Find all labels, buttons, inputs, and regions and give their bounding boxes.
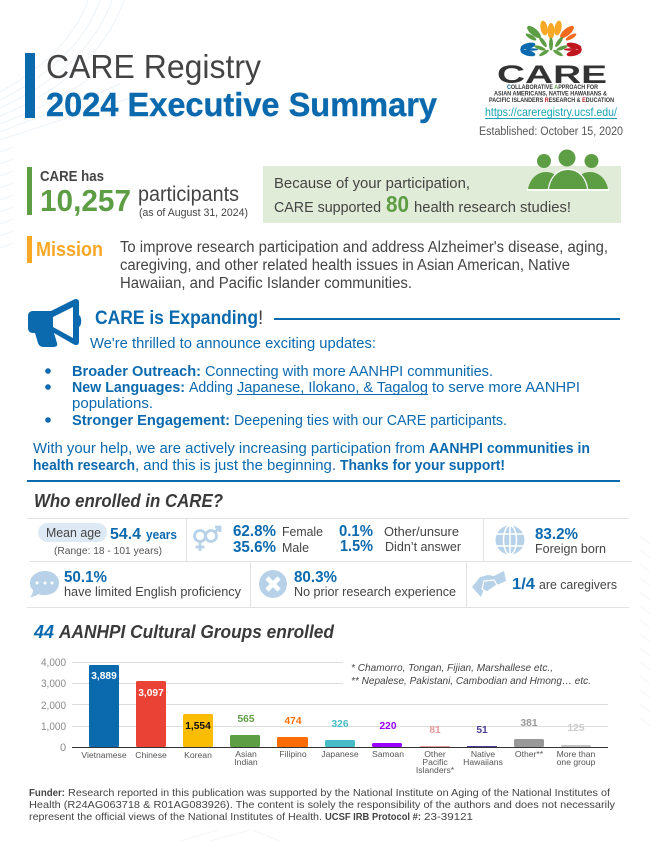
bullet list: Broader Outreach: <box>72 364 201 380</box>
bar chart: 3,000 <box>41 678 66 690</box>
bar values: 81 <box>429 725 441 736</box>
stat: mean age: (Range: 18 - 101 years) <box>54 545 162 557</box>
stat: foreign born: Foreign born <box>535 542 606 556</box>
established date: Established: October 15, 2020 <box>479 126 623 138</box>
stat: foreign born: 83.2% <box>535 526 578 543</box>
stat: gender: Female <box>282 525 323 539</box>
category labels: Hawaiians <box>463 757 503 767</box>
bullet list: Deepening ties with our CARE participants. <box>234 413 507 429</box>
CARE logo: PACIFIC ISLANDERS RESEARCH & EDUCATION <box>489 98 614 104</box>
mission <box>27 236 608 292</box>
website link: https://careregistry.ucsf.edu/ <box>485 105 618 119</box>
bar chart: 4,000 <box>41 657 66 669</box>
category labels: Other** <box>515 749 544 759</box>
funder statement: UCSF IRB Protocol #: <box>325 811 421 823</box>
closing message: , and this is just the beginning. <box>135 457 336 474</box>
stat: caregivers: are caregivers <box>539 578 617 592</box>
bar values: 220 <box>380 721 397 732</box>
title: 2024 Executive Summary <box>46 86 438 123</box>
panel: research studies <box>263 150 621 223</box>
bar values: 565 <box>238 714 255 725</box>
funder statement: Research reported in this publication was supported by the National Institute on Aging of the National Institutes of <box>68 787 610 799</box>
CARE logo: ASIAN AMERICANS, NATIVE HAWAIIANS & <box>494 92 608 98</box>
funder statement: Health (R24AG063718 & R01AG083926). The content is solely the responsibility of the authors and does not necessarily <box>29 799 616 811</box>
category labels: Indian <box>234 757 258 767</box>
stat: research experience <box>294 569 456 599</box>
CARE logo: COLLABORATIVE APPROACH FOR <box>507 85 599 91</box>
panel: research studies: health research studies! <box>414 199 571 216</box>
category labels: Pacific <box>422 757 448 767</box>
bullet list: Japanese, Ilokano, & Tagalog <box>237 380 428 396</box>
bar values: 125 <box>568 723 585 734</box>
stat: gender: 0.1% <box>339 523 373 540</box>
participants count: participants <box>138 183 239 206</box>
bar chart: 1,000 <box>41 721 66 733</box>
stat: research experience: 80.3% <box>294 569 337 586</box>
bullet list: New Languages: <box>72 380 185 396</box>
stat: mean age <box>38 523 177 557</box>
icon: globe <box>496 525 524 555</box>
icon: speech bubble <box>30 571 59 597</box>
stat: mean age: years <box>146 527 177 542</box>
funder statement: Funder: <box>29 787 65 799</box>
bar values: 381 <box>520 718 538 729</box>
bar values: 1,554 <box>185 721 211 732</box>
icon: people <box>525 150 611 191</box>
closing message <box>27 440 620 482</box>
title <box>25 48 438 123</box>
stat: gender: 35.6% <box>233 539 276 556</box>
heading: cultural groups: AANHPI Cultural Groups enrolled <box>58 621 335 642</box>
category labels: Islanders* <box>416 765 455 775</box>
heading: Who enrolled: Who enrolled in CARE? <box>34 490 223 511</box>
CARE logo: CARE <box>497 61 607 89</box>
category labels: Japanese <box>321 749 359 759</box>
bar values: 3,097 <box>138 688 164 699</box>
participants count: 10,257 <box>40 183 131 218</box>
category labels: Native <box>471 749 495 759</box>
stat: gender <box>233 523 461 556</box>
bar values: 474 <box>284 716 302 727</box>
heading: CARE is Expanding <box>95 308 620 329</box>
mission: Mission <box>36 239 103 261</box>
category labels <box>81 749 596 775</box>
heading: cultural groups: 44 <box>33 621 54 642</box>
stat: gender: 1.5% <box>340 538 373 555</box>
panel: research studies: 80 <box>386 191 409 217</box>
chart footnotes: * Chamorro, Tongan, Fijian, Marshallese etc., <box>351 662 553 674</box>
bullet list <box>45 364 580 429</box>
stat: caregivers <box>512 576 617 593</box>
stat: mean age: 54.4 <box>110 526 141 543</box>
mission: Hawaiian, and Pacific Islander communities. <box>120 275 412 292</box>
stat: English proficiency: have limited English proficiency <box>64 585 242 599</box>
bar values: 326 <box>332 719 349 730</box>
icon: megaphone <box>28 299 81 347</box>
stat: foreign born <box>535 526 606 556</box>
participants count: (as of August 31, 2024) <box>139 207 248 219</box>
bars <box>89 665 591 748</box>
panel: research studies: CARE supported <box>274 199 381 216</box>
stat: gender: Other/unsure <box>384 525 459 539</box>
category labels: Chinese <box>135 750 167 760</box>
funder statement <box>29 787 616 823</box>
bar values <box>91 671 585 736</box>
title: CARE Registry <box>46 48 261 85</box>
participants count: CARE has <box>40 169 104 185</box>
intro text: We're thrilled to announce exciting updates: <box>90 335 376 352</box>
closing message: Thanks for your support! <box>340 457 505 474</box>
stat: English proficiency <box>64 569 242 599</box>
mission: caregiving, and other related health issues in Asian American, Native <box>120 257 570 274</box>
stat: gender: 62.8% <box>233 523 276 540</box>
stat: mean age: Mean age <box>46 526 101 540</box>
category labels: More than <box>557 749 596 759</box>
icon: handshake <box>472 571 506 597</box>
closing message: With your help, we are actively increasing participation from <box>33 440 425 457</box>
funder statement: 23-39121 <box>424 811 473 823</box>
category labels: Filipino <box>279 749 307 759</box>
panel: research studies: Because of your participation, <box>274 175 470 192</box>
stat: gender: Male <box>282 541 309 555</box>
closing message: AANHPI communities in <box>429 440 590 457</box>
bullet list: Stronger Engagement: <box>72 413 230 429</box>
bar values: 51 <box>476 725 488 736</box>
stat: research experience: No prior research experience <box>294 585 456 599</box>
category labels: one group <box>557 757 596 767</box>
stat: English proficiency: 50.1% <box>64 569 107 586</box>
bullet list: populations. <box>72 396 153 412</box>
icon: gender symbols <box>194 527 220 551</box>
closing message: health research <box>33 457 135 474</box>
bar chart <box>41 657 608 775</box>
mission: To improve research participation and address Alzheimer's disease, aging, <box>120 239 608 256</box>
icon: x circle <box>259 570 287 598</box>
bar values: 3,889 <box>91 671 117 682</box>
stat: gender: Didn’t answer <box>385 540 461 554</box>
bar chart: 2,000 <box>41 700 66 712</box>
chart footnotes: ** Nepalese, Pakistani, Cambodian and Hmong… etc. <box>351 675 591 687</box>
category labels: Vietnamese <box>81 750 127 760</box>
heading: CARE is Expanding: ! <box>258 308 263 329</box>
category labels: Samoan <box>372 749 404 759</box>
category labels: Other <box>424 749 446 759</box>
bullet list: to serve more AANHPI <box>432 380 580 396</box>
CARE logo <box>489 20 614 104</box>
icon: lotus petals <box>520 20 582 58</box>
funder statement: represent the official views of the National Institutes of Health. <box>29 811 322 823</box>
bullet list: Connecting with more AANHPI communities. <box>205 364 493 380</box>
bar chart: 0 <box>60 742 66 754</box>
bullet list: Adding <box>189 380 233 396</box>
participants count <box>27 167 248 219</box>
heading: CARE is Expanding: CARE is Expanding <box>95 308 258 329</box>
category labels: Asian <box>235 749 257 759</box>
category labels: Korean <box>184 750 212 760</box>
chart footnotes <box>351 662 591 687</box>
stat: caregivers: 1/4 <box>512 576 535 593</box>
